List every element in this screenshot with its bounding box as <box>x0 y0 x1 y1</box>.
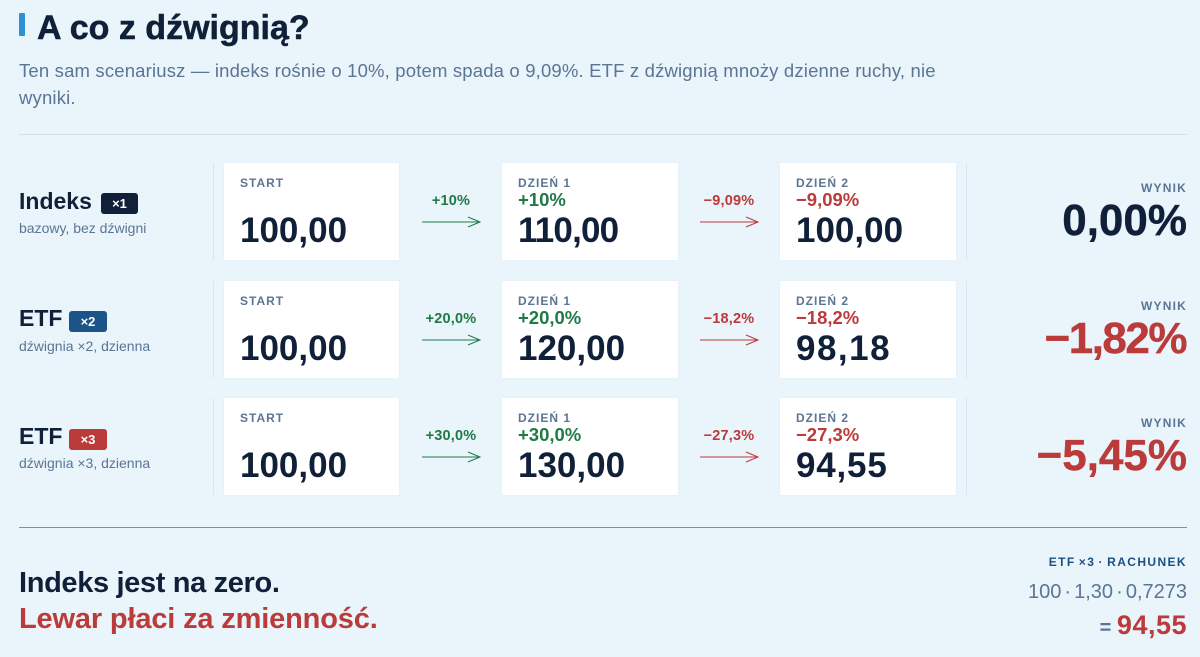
result label: WYNIK <box>1141 416 1187 430</box>
conclusion <box>19 567 378 635</box>
card: day 2: 98,18 <box>796 328 891 368</box>
subtitle: Ten sam scenariusz — indeks rośnie o 10%, potem spada o 9,09%. ETF z dźwignią mnoży dzienne ruchy, nie <box>19 60 936 81</box>
conclusion: Indeks jest na zero. <box>19 567 280 599</box>
result label: WYNIK <box>1141 298 1187 312</box>
arrow: day 1 <box>422 334 481 346</box>
card: day 2 <box>780 398 956 495</box>
badge x2: ×2 <box>81 314 95 328</box>
card: day 1 <box>502 163 678 260</box>
conclusion: Lewar płaci za zmienność. <box>19 603 378 635</box>
title: A co z dźwignią? <box>37 9 310 47</box>
subtitle: wyniki. <box>19 87 76 108</box>
card: start <box>224 398 399 495</box>
arrow: day 2 <box>700 452 759 462</box>
row: ETF x2 <box>19 281 1187 378</box>
card: day 1: 110,00 <box>518 211 618 250</box>
title accent bar <box>19 13 25 36</box>
row label: Indeks: Indeks <box>19 188 92 214</box>
card: start: 100,00 <box>240 328 347 368</box>
row description: dźwignia ×2, dzienna <box>19 338 150 354</box>
card: day 2: DZIEŃ 2 <box>796 411 849 425</box>
card: start: 100,00 <box>240 446 347 485</box>
change label day 1: +20,0% <box>426 310 476 326</box>
card: day 2: 100,00 <box>796 211 903 250</box>
card: start: START <box>240 294 284 308</box>
card: day 1: DZIEŃ 1 <box>518 294 571 308</box>
card: start: 100,00 <box>240 211 347 250</box>
change label day 2: −27,3% <box>704 428 754 444</box>
result value: −5,45% <box>1037 431 1187 480</box>
subtitle <box>19 60 936 108</box>
calculation formula: 100 · 1,30 · 0,7273 <box>1028 581 1187 603</box>
result value: 0,00% <box>1062 196 1187 245</box>
card: start <box>224 163 399 260</box>
change label day 1: +10% <box>432 193 470 209</box>
card: day 1: +10% <box>518 189 566 210</box>
card: day 2: −27,3% <box>796 424 859 445</box>
card: day 1: +20,0% <box>518 306 581 328</box>
arrow: day 2 <box>700 216 759 228</box>
row label: ETF: ETF <box>19 423 62 449</box>
badge x3: ×3 <box>81 432 95 447</box>
change label day 2: −9,09% <box>704 193 754 209</box>
card: day 1 <box>502 398 678 495</box>
card: day 1: +30,0% <box>518 424 581 445</box>
card: day 1: DZIEŃ 1 <box>518 411 571 425</box>
row: ETF x3 <box>19 398 1187 495</box>
row description: dźwignia ×3, dzienna <box>19 455 150 471</box>
card: day 2: DZIEŃ 2 <box>796 294 849 308</box>
result label: WYNIK <box>1141 181 1187 195</box>
card: day 1 <box>502 280 678 378</box>
badge x1: ×1 <box>112 196 127 211</box>
result value: −1,82% <box>1045 314 1186 362</box>
change label day 1: +30,0% <box>426 428 476 444</box>
card: start: START <box>240 411 284 425</box>
row label: ETF: ETF <box>19 305 62 331</box>
arrow: day 2 <box>700 334 759 346</box>
calculation result: = 94,55 <box>1100 610 1187 640</box>
arrow: day 1 <box>422 452 481 462</box>
card: day 2: −18,2% <box>796 306 859 328</box>
card: day 2: 94,55 <box>796 446 888 485</box>
row description: bazowy, bez dźwigni <box>19 220 146 236</box>
card: start <box>224 280 399 378</box>
change label day 2: −18,2% <box>704 310 754 326</box>
card: day 2 <box>780 280 956 378</box>
row: Indeks x1 <box>19 163 1187 260</box>
card: start: START <box>240 176 284 190</box>
card: day 2: −9,09% <box>796 189 859 210</box>
card: day 1: DZIEŃ 1 <box>518 176 571 190</box>
badge x2 <box>69 310 107 332</box>
calculation heading: ETF ×3 · RACHUNEK <box>1049 555 1187 569</box>
badge x1 <box>101 193 138 214</box>
card: day 2: DZIEŃ 2 <box>796 176 849 190</box>
arrow: day 1 <box>422 216 481 228</box>
card: day 1: 130,00 <box>518 446 625 485</box>
badge x3 <box>69 429 107 450</box>
card: day 1: 120,00 <box>518 328 625 368</box>
card: day 2 <box>780 163 956 260</box>
